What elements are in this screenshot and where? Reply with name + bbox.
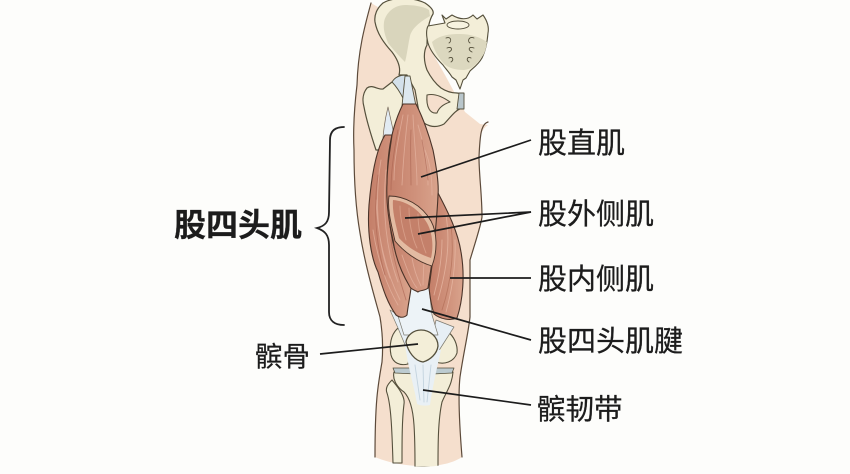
heading: quadriceps: 股四头肌: [174, 207, 302, 243]
hip cartilage: [392, 75, 411, 100]
leader: vastus medialis: [450, 277, 531, 279]
rectus femoris tendon top: [402, 76, 416, 106]
iliac fossa shading: [384, 5, 430, 62]
obturator foramen: [427, 94, 450, 113]
vastus lateralis tendon top: [383, 107, 394, 138]
label: vastus medialis: 股内侧肌: [538, 263, 654, 296]
rectus femoris: [387, 104, 438, 292]
leader: quadriceps tendon: [422, 309, 531, 340]
vastus lateralis: [368, 135, 411, 317]
patellar ligament: [405, 345, 441, 406]
label: quadriceps tendon: 股四头肌腱: [538, 325, 683, 358]
femur head and trochanter: [363, 75, 415, 150]
fibula: [386, 380, 404, 463]
leader: rectus femoris: [421, 140, 531, 177]
label: rectus femoris: 股直肌: [538, 127, 625, 160]
patella: [406, 330, 438, 362]
quadriceps tendon: [398, 288, 438, 335]
leg anatomy illustration: [354, 0, 488, 474]
pubic symphysis: [457, 93, 464, 109]
skin silhouette: [354, 3, 488, 466]
vastus intermedius window: [389, 196, 436, 266]
label: patella: 髌骨: [255, 341, 310, 372]
leader: patella: [320, 344, 418, 354]
leader: patellar ligament: [423, 390, 531, 405]
vastus medialis: [429, 193, 463, 319]
label: patellar ligament: 髌韧带: [537, 394, 623, 426]
label: vastus lateralis: 股外侧肌: [538, 198, 654, 231]
pelvis: hip bone: [375, 0, 464, 126]
tibia: [394, 372, 453, 467]
brace: quadriceps group: [317, 127, 344, 325]
sacrum: [426, 15, 488, 89]
femoral condyles: [390, 325, 457, 365]
quadriceps side retinaculum: [390, 310, 454, 352]
leader: vastus lateralis: [405, 212, 531, 234]
menisci: [393, 368, 454, 374]
bottom fade: [370, 456, 466, 474]
